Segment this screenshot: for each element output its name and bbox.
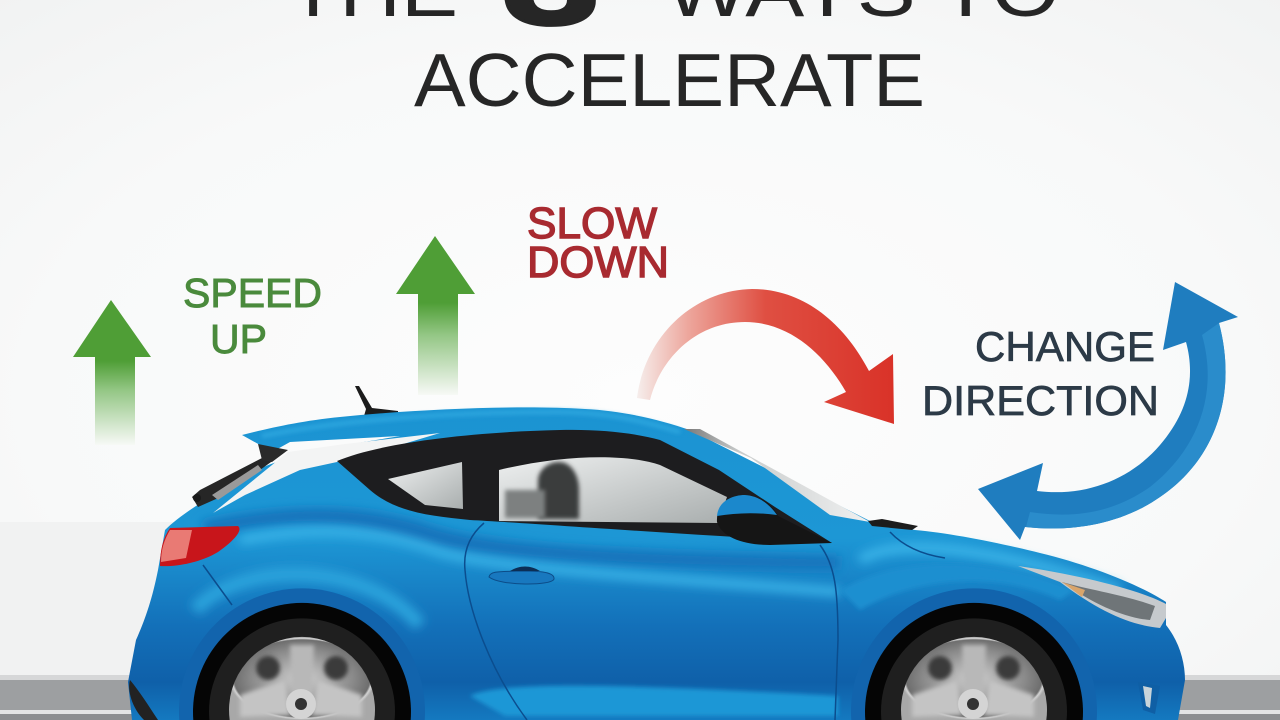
- headlight: [1018, 566, 1166, 628]
- label: speed up: SPEED: [183, 270, 322, 316]
- front side glass: [499, 457, 727, 523]
- rear wheel: [179, 588, 425, 720]
- car body: [128, 407, 1185, 720]
- door handle: [489, 566, 554, 584]
- arrow: speed up left: [73, 300, 151, 445]
- label: slow down: DOWN: [527, 238, 669, 287]
- rear arch highlight: [195, 574, 420, 625]
- label: change direction: DIRECTION: [922, 377, 1159, 424]
- seat shading: [505, 490, 545, 518]
- driver silhouette: [538, 462, 579, 519]
- sill highlight: [470, 686, 838, 716]
- label: slow down: [527, 199, 669, 287]
- road: [0, 675, 1280, 720]
- title: [287, 0, 1060, 122]
- rear side glass: [388, 462, 463, 509]
- label: change direction: CHANGE: [975, 323, 1155, 370]
- label: change direction: [922, 323, 1159, 424]
- white stripe: [213, 433, 440, 513]
- rear window strip: [192, 452, 285, 507]
- label: speed up: UP: [210, 316, 267, 362]
- side mirror: [717, 495, 832, 545]
- arrow: change direction: [978, 282, 1238, 540]
- roof highlight: [262, 412, 680, 436]
- rear bumper: [129, 680, 158, 720]
- spoiler shadow: [258, 444, 288, 462]
- label: speed up: [183, 270, 322, 362]
- tail light: [160, 526, 239, 566]
- shoulder shading: [200, 508, 1120, 610]
- car: [128, 386, 1185, 720]
- windshield: [684, 429, 870, 522]
- arrow: slow down: [637, 289, 894, 424]
- front wheel: [851, 588, 1097, 720]
- wiper: [868, 519, 918, 530]
- label: slow down: SLOW: [527, 199, 657, 248]
- antenna: [355, 386, 398, 416]
- arrow: speed up right: [396, 236, 475, 395]
- title: ACCELERATE: [414, 38, 925, 122]
- fog light: [1138, 682, 1160, 714]
- door seams: [203, 523, 945, 720]
- side windows: [337, 430, 832, 543]
